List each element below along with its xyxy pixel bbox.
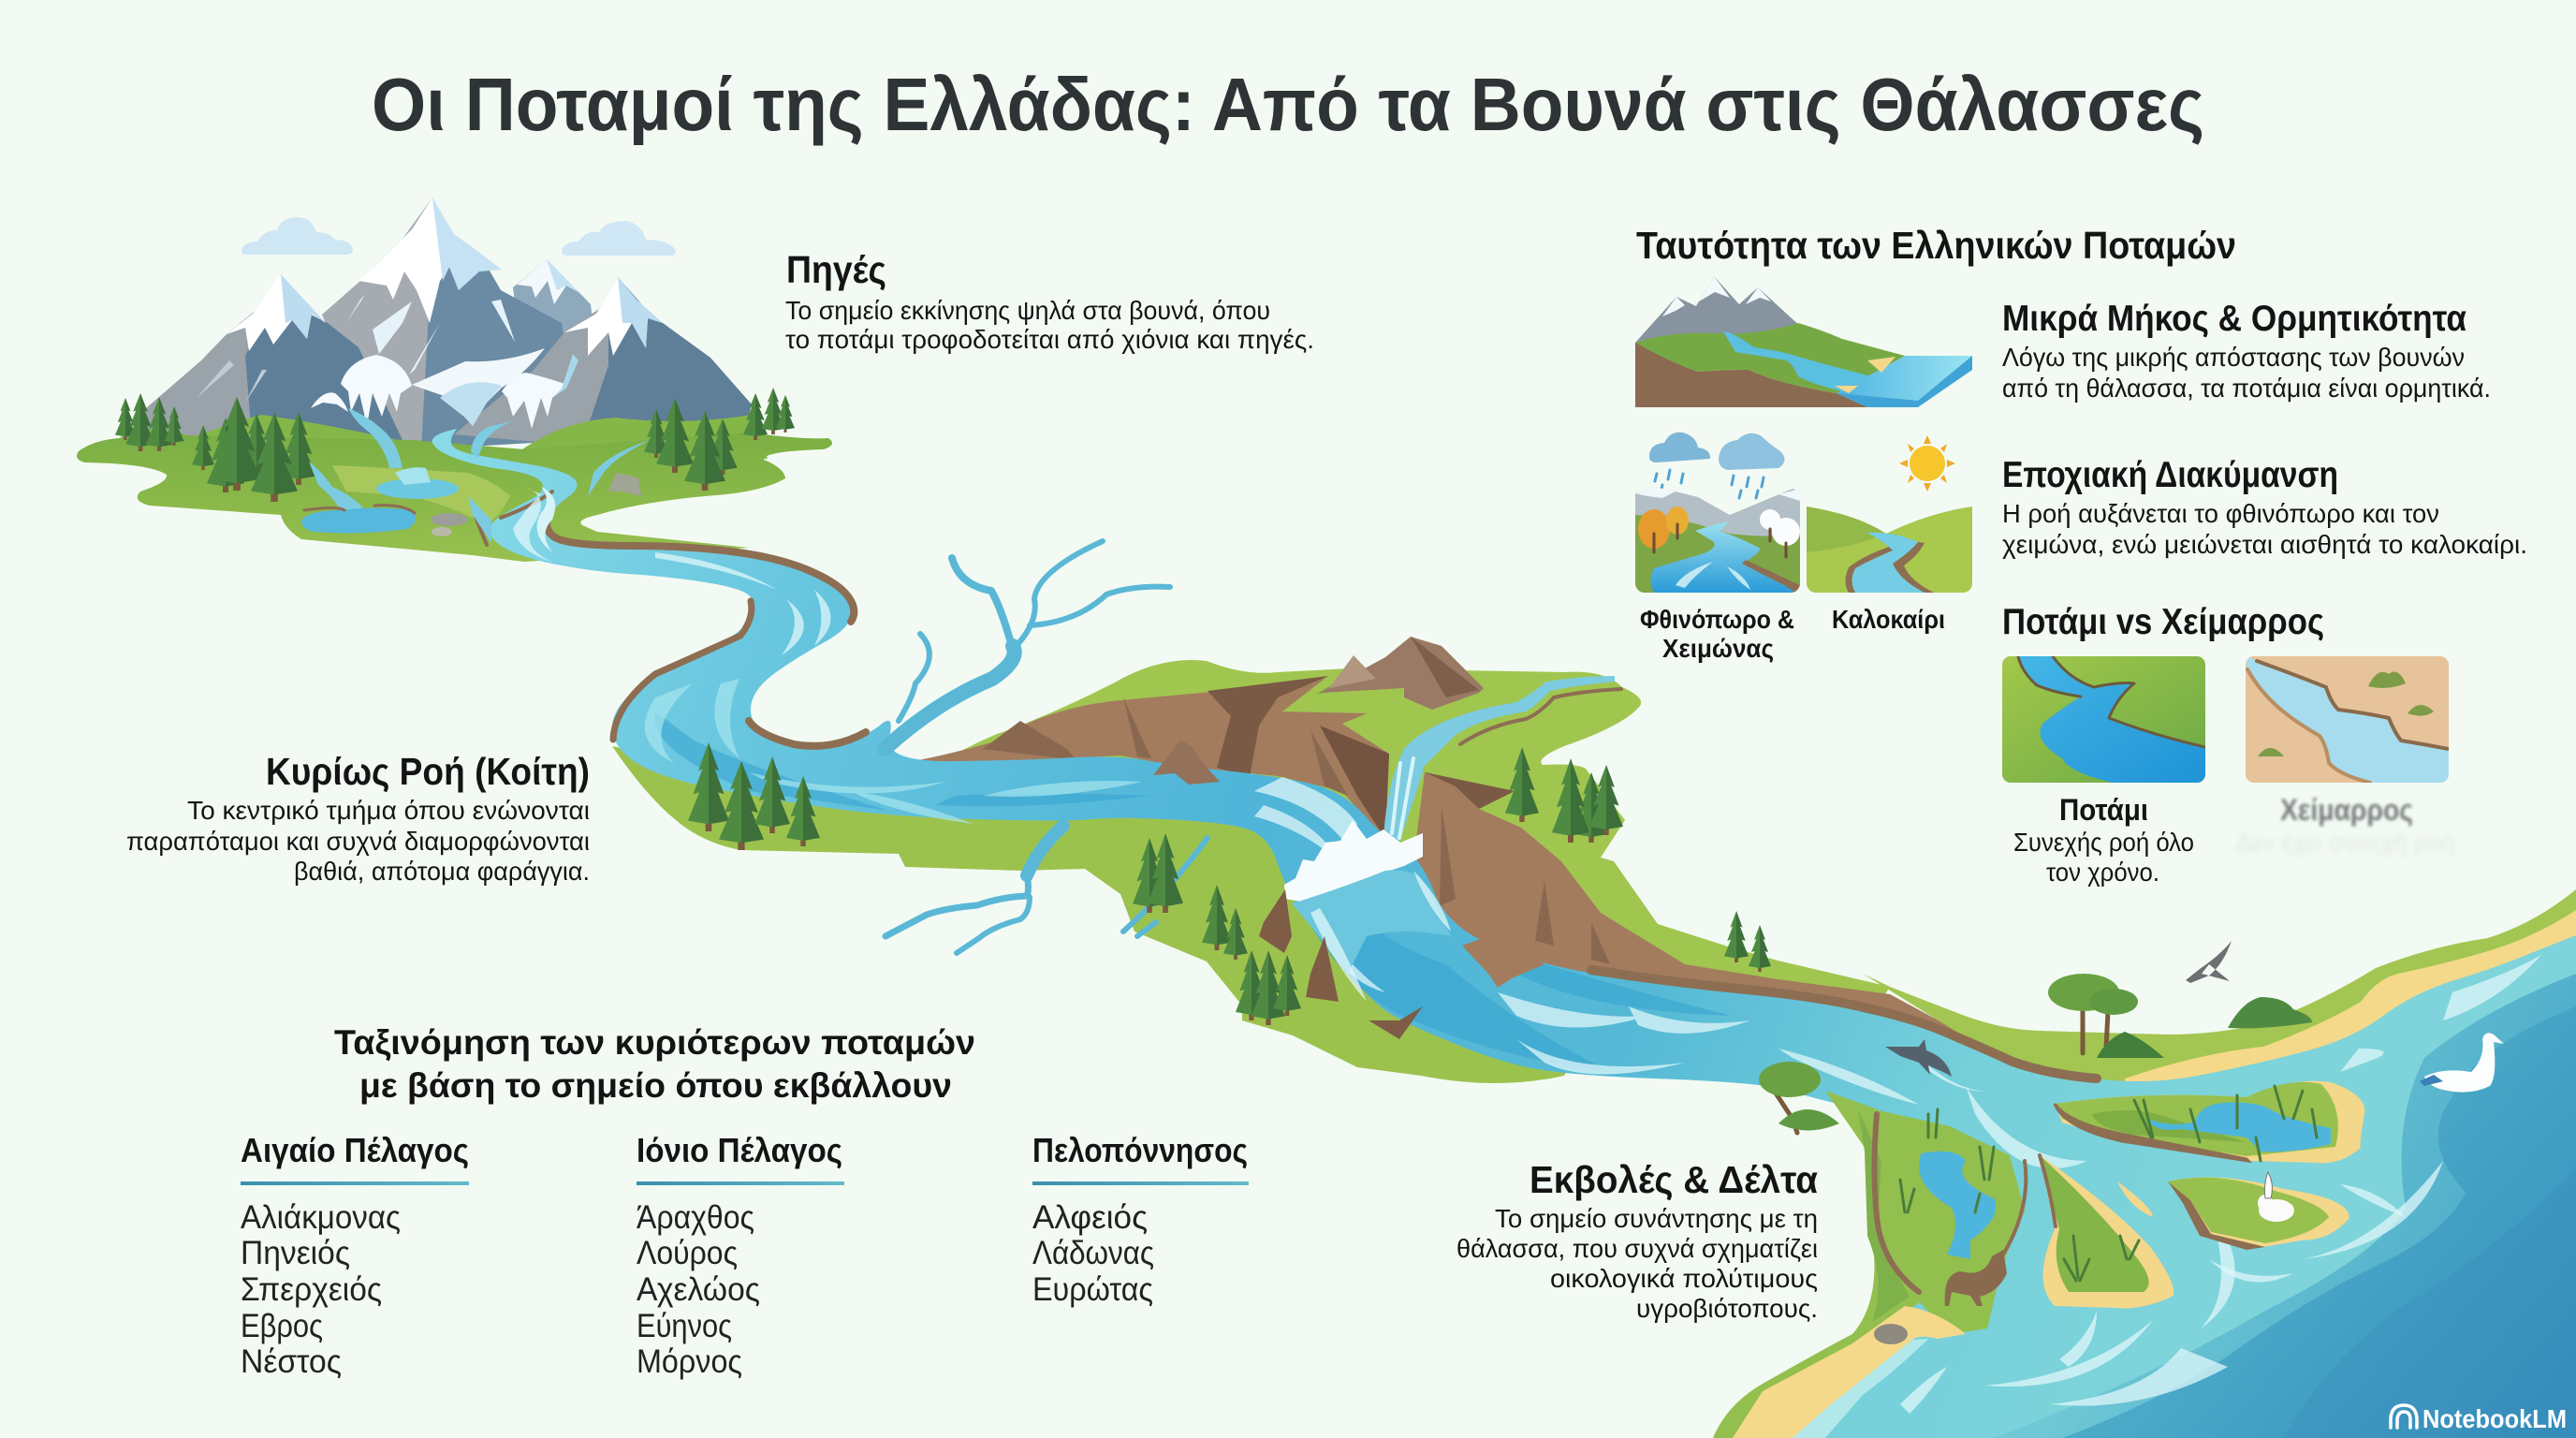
- illustration: short steep river: [1635, 276, 1972, 407]
- land: delta left coast: [1713, 1091, 2025, 1438]
- light meadow: [332, 465, 510, 524]
- text: seasonal variation: [2002, 455, 2527, 559]
- labels: seasons: Φθινόπωρο &: [1640, 605, 1794, 634]
- title: Οι Ποταμοί της Ελλάδας: Από τα Βουνά στις Θάλασσες: [372, 63, 2204, 146]
- description: Το σημείο εκκίνησης ψηλά στα βουνά, όπου: [785, 296, 1270, 325]
- torrent label (faded): Χείμαρρος: [2280, 793, 2413, 827]
- river main channel: [432, 429, 2576, 1438]
- river label: [2013, 793, 2194, 887]
- description: Το σημείο συνάντησης με τη: [1495, 1204, 1818, 1233]
- icon: snowy trees: [1760, 509, 1800, 557]
- back peak: [513, 259, 599, 374]
- sand: [2125, 910, 2576, 1084]
- text: seasonal variation: χειμώνα, ενώ μειώνεται αισθητά το καλοκαίρι.: [2002, 530, 2527, 559]
- green coast: [1863, 889, 2576, 1095]
- icon: deer: [1945, 1250, 2007, 1306]
- column: Aegean: Αλιάκμονας: [241, 1199, 401, 1236]
- text block: Κυρίως Ροή: παραπόταμοι και συχνά διαμορφώνονται: [126, 827, 590, 856]
- text block: Εκβολές & Δέλτα: οικολογικά πολύτιμους: [1550, 1264, 1818, 1293]
- column: Peloponnese: Αλφειός: [1032, 1199, 1148, 1236]
- text block: Εκβολές & Δέλτα: θάλασσα, που συχνά σχηματίζει: [1456, 1234, 1818, 1263]
- river label: τον χρόνο.: [2046, 858, 2159, 887]
- sea deepening: [1900, 974, 2576, 1438]
- labels: seasons: [1640, 605, 1945, 663]
- river banks: [476, 492, 2097, 1078]
- icon: swan: [2420, 1033, 2504, 1093]
- text block: Πηγές: [785, 248, 1314, 354]
- panel: identity of Greek rivers: [1635, 224, 2527, 887]
- main waterfall foam: [1284, 820, 1423, 903]
- heading: Ταυτότητα των Ελληνικών Ποταμών: [1636, 224, 2236, 267]
- labels: seasons: Καλοκαίρι: [1832, 605, 1945, 634]
- text block: Εκβολές & Δέλτα: [1456, 1158, 1818, 1323]
- column: Peloponnese: Ευρώτας: [1032, 1271, 1153, 1308]
- column: Aegean: Πηνειός: [241, 1235, 350, 1271]
- land: mountain island: [77, 429, 832, 562]
- land: left peninsula under river: [612, 746, 1591, 1083]
- heading: river vs torrent: Ποτάμι vs Χείμαρρος: [2002, 602, 2324, 642]
- land: cliff plateau: [877, 660, 1965, 1034]
- center peak: [322, 198, 580, 449]
- column: Ionian: Εύηνος: [637, 1308, 732, 1344]
- text: short length: Λόγω της μικρής απόστασης των βουνών: [2002, 343, 2465, 372]
- river label: Συνεχής ροή όλο: [2013, 828, 2194, 857]
- cliff walls right: [1413, 772, 1965, 1034]
- text block: Πηγές: το ποτάμι τροφοδοτείται από χιόνια και πηγές.: [785, 325, 1314, 354]
- column: Ionian: Αχελώος: [637, 1271, 760, 1308]
- description: Το κεντρικό τμήμα όπου ενώνονται: [187, 796, 590, 825]
- text: seasonal variation: Η ροή αυξάνεται το φθινόπωρο και τον: [2002, 499, 2439, 528]
- column: Ionian: Λούρος: [637, 1235, 738, 1271]
- trees: delta acacias and bushes: [1759, 974, 2312, 1133]
- column: Aegean: Νέστος: [241, 1343, 342, 1380]
- green ledge: [1282, 668, 1619, 749]
- mountains: [122, 198, 768, 468]
- delta island: teardrop: [2040, 1155, 2174, 1308]
- river darker currents: [654, 712, 1732, 1072]
- heading: Πηγές: [786, 248, 886, 291]
- left peak: [122, 274, 402, 449]
- cliff walls left: [877, 676, 1389, 843]
- column: Aegean: Εβρος: [241, 1308, 323, 1344]
- delta: coast wetland pond: [1874, 1109, 2026, 1344]
- heading: Εκβολές & Δέλτα: [1530, 1158, 1818, 1201]
- upper green plateau: [963, 660, 1890, 1030]
- text: seasonal variation: Εποχιακή Διακύμανση: [2002, 455, 2338, 495]
- icon: right cloud: [562, 221, 676, 256]
- text: short length: [2002, 299, 2491, 403]
- column: Ionian: Μόρνος: [637, 1343, 742, 1380]
- column: Ionian: [637, 1131, 844, 1380]
- streams and ponds on island: [301, 408, 650, 552]
- illustration: summer: [1807, 435, 1972, 593]
- river label: Ποτάμι: [2059, 793, 2148, 827]
- column: Ionian: Ιόνιο Πέλαγος: [637, 1131, 842, 1169]
- tributaries: [885, 541, 1208, 953]
- column: Aegean: Αιγαίο Πέλαγος: [241, 1131, 469, 1169]
- text: short length: από τη θάλασσα, τα ποτάμια είναι ορμητικά.: [2002, 374, 2491, 403]
- icon: rain clouds: [1649, 433, 1785, 498]
- panel: classification of rivers: με βάση το σημείο όπου εκβάλλουν: [359, 1066, 952, 1105]
- torrent label (faded): [2235, 793, 2455, 857]
- icon: sun: [1899, 435, 1955, 492]
- text block: Κυρίως Ροή: βαθιά, απότομα φαράγγια.: [294, 857, 590, 886]
- text block: Κυρίως Ροή: [126, 750, 590, 886]
- column: Aegean: [241, 1131, 469, 1380]
- sand strip: [1733, 1306, 1966, 1438]
- column: Aegean: Σπερχειός: [241, 1271, 382, 1308]
- column: Peloponnese: [1032, 1131, 1249, 1308]
- icon: small brown mountain: [1320, 637, 1484, 710]
- icon: autumn trees: [1638, 506, 1689, 552]
- panel: classification of rivers: [241, 1023, 1249, 1380]
- delta island: pond island: [2055, 1081, 2364, 1163]
- icon: rabbit: [2258, 1172, 2294, 1222]
- rocks: [1153, 740, 1544, 1039]
- land: river right bank and beach: [1863, 889, 2576, 1095]
- text block: Εκβολές & Δέλτα: υγροβιότοπους.: [1636, 1294, 1818, 1323]
- green foothills: [168, 415, 768, 468]
- torrent label (faded): Δεν έχει συνεχή ροή: [2235, 828, 2455, 857]
- heading: Κυρίως Ροή (Κοίτη): [266, 750, 590, 793]
- lower falls: [1292, 870, 1451, 1002]
- illustration: river thumbnail: [2002, 656, 2205, 783]
- text: short length: Μικρά Μήκος & Ορμητικότητα: [2002, 299, 2466, 339]
- icon: notebook mark: [2391, 1405, 2417, 1428]
- tributary and high waterfall: [1383, 676, 1621, 843]
- column: Peloponnese: Λάδωνας: [1032, 1235, 1154, 1271]
- right peak: [454, 277, 752, 449]
- illustration: torrent thumbnail: [2246, 656, 2449, 783]
- trees: mountain island: [115, 388, 795, 502]
- icon: dolphin: [1885, 1039, 1952, 1077]
- labels: seasons: Χειμώνας: [1662, 634, 1774, 663]
- column: Ionian: Άραχθος: [637, 1199, 754, 1236]
- icon: left cloud: [242, 217, 353, 255]
- column: Peloponnese: Πελοπόννησος: [1032, 1131, 1248, 1169]
- icon: bird: [2186, 941, 2232, 983]
- illustration: autumn and winter: [1635, 433, 1800, 593]
- glaciers: [311, 348, 578, 429]
- river highlights: [513, 487, 2541, 1168]
- trees: river and cliffs: [688, 742, 1771, 1025]
- heading: Ταξινόμηση των κυριότερων ποταμών: [334, 1023, 975, 1062]
- delta island: rabbit island: [2168, 1172, 2349, 1250]
